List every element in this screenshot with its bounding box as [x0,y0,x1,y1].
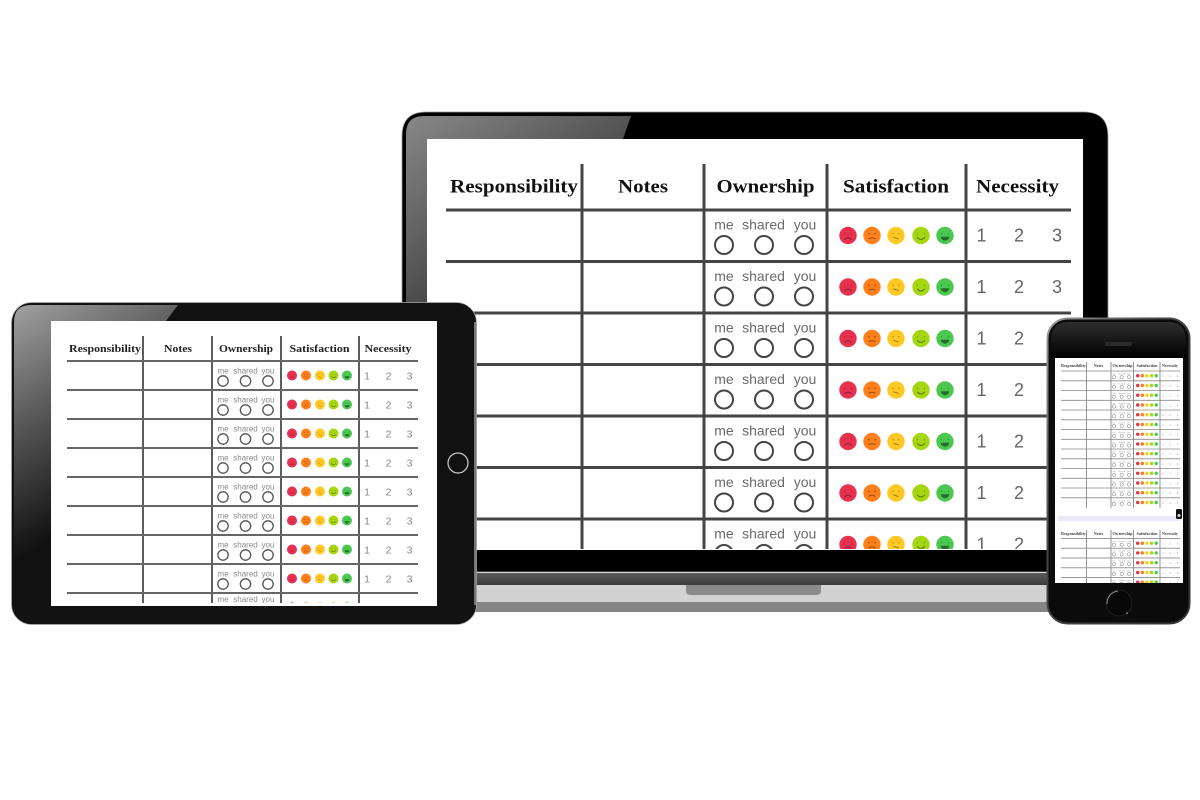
phone page 1 row 10: you [1127,461,1132,463]
tablet row 9 [218,596,349,603]
tablet row 7: 1 [364,544,370,556]
tablet row 2: 2 [386,400,392,412]
tablet row 4: 2 [386,458,392,470]
phone page 1 row 8: shared [1118,441,1126,444]
tablet row 5: shared [233,482,258,492]
phone page 1 row 9: shared [1118,450,1126,454]
phone page 1 row 12: 3 [1177,481,1179,485]
laptop row 2: 2 [1014,277,1024,297]
laptop row 3: 1 [976,329,987,349]
phone page 1 header: Necessity [1162,364,1178,368]
phone page 1 row 13: me [1112,490,1116,492]
laptop table header: Notes [618,176,668,198]
phone page 1 row 14: 1 [1162,501,1164,505]
phone page 1 row 14: shared [1118,499,1126,502]
phone page 1 row 14: you [1127,500,1132,502]
phone worksheet page 1 [1061,362,1180,508]
laptop row 1: you [794,216,816,232]
tablet home button [448,453,468,473]
phone page 1 row 4: 3 [1177,403,1179,407]
phone page 1 header: Notes [1094,364,1104,368]
phone page 1 row 4: you [1127,403,1132,405]
phone page 1 row 11: me [1112,471,1116,473]
phone page 1 row 1: 2 [1169,374,1171,378]
tablet row 5: 1 [364,486,370,498]
laptop table header: Satisfaction [843,176,949,198]
phone page 1 row 4: me [1112,403,1116,405]
phone page 1 row 10: shared [1118,460,1126,463]
tablet row 3: 3 [407,428,413,440]
phone home button [1106,590,1132,616]
tablet row 8: you [262,570,274,578]
phone page 1 row 1: me [1112,374,1116,376]
phone page 1 row 9: me [1112,452,1116,454]
laptop row 7: me [714,526,734,542]
phone page 2 row 2: 3 [1177,551,1179,555]
phone page 1 row 1: 3 [1177,374,1179,378]
phone page 1 row 11: 1 [1162,472,1164,476]
phone page 2 row 2 [1112,550,1179,556]
phone page 1 row 2: 2 [1169,384,1171,388]
laptop row 3: you [794,320,816,336]
laptop screen [427,139,1083,550]
phone page 1 row 4: 2 [1169,403,1171,407]
tablet row 7: 3 [407,544,413,556]
phone page 1 row 11: you [1127,471,1132,473]
phone page 1 row 2: 1 [1162,384,1164,388]
laptop row 6: 3 [1052,483,1062,503]
phone page 2 row 3: 2 [1169,561,1171,565]
phone page 1 row 3: 3 [1177,394,1179,398]
laptop row 5: you [794,422,816,438]
laptop row 7: shared [742,526,785,542]
phone page 1 row 6: shared [1118,421,1126,424]
phone page 2 row 1: 1 [1162,542,1164,546]
laptop table header: Ownership [716,176,814,198]
phone page 2 header [1061,532,1178,536]
phone page 1 row 5: me [1112,412,1116,414]
phone page 1 row 5: shared [1118,412,1126,414]
phone page 2 row 4: 2 [1169,571,1171,575]
phone page 1 row 9: 3 [1177,452,1179,456]
tablet row 1: 1 [364,370,370,382]
tablet row 9: me [217,595,229,604]
phone page 1 header [1061,364,1178,368]
phone page 1 row 14: me [1112,500,1116,502]
phone page 1 row 1 [1112,372,1179,379]
phone page 1 row 5: 1 [1162,413,1164,417]
phone page 1 row 10 [1112,460,1179,467]
tablet row 6: 3 [407,516,413,528]
phone page 1 row 2 [1112,382,1179,389]
laptop row 6 [714,477,1024,512]
phone page 1 row 6: 2 [1169,423,1171,427]
phone page 1 header: Satisfaction [1136,364,1158,368]
tablet table header: Notes [164,343,193,355]
phone page 1 row 11: 2 [1169,472,1171,476]
phone page 1 row 12: me [1112,481,1116,483]
tablet bezel gloss [14,305,178,604]
phone page 2 row 4: 3 [1177,571,1179,575]
laptop row 1: 3 [1052,226,1062,246]
phone page 2 header: Satisfaction [1136,532,1158,536]
phone page 1 row 4: 1 [1162,403,1164,407]
phone page 1 row 3: 2 [1169,394,1171,398]
laptop row 5: 1 [976,432,987,452]
laptop row 7: 2 [1014,535,1024,555]
phone page 1 row 5: 2 [1169,413,1171,417]
tablet row 1: shared [233,366,258,376]
laptop row 1: shared [742,216,785,232]
phone page 1 row 5: you [1127,412,1132,414]
phone page 1 row 8 [1112,441,1179,447]
tablet row 1: 3 [407,370,413,382]
tablet row 6: you [262,512,274,520]
tablet row 2: you [262,396,274,404]
tablet row 2: 1 [364,400,370,412]
phone page 2 header: Responsibility [1061,532,1086,536]
phone page 1 row 3: shared [1118,392,1126,395]
phone page 1 row 4 [1112,402,1179,408]
phone page 1 row 10: 3 [1177,462,1179,466]
laptop row 3: me [714,320,734,336]
phone page 1 row 13: shared [1118,490,1126,492]
phone page 1 row 4: shared [1118,402,1126,405]
tablet row 8: me [217,570,229,578]
phone page 2 row 3: shared [1118,560,1126,562]
laptop row 1: 2 [1014,226,1024,246]
laptop row 5: 3 [1052,432,1062,452]
laptop row 4: shared [742,371,785,387]
phone page 2 header: Notes [1094,532,1104,536]
laptop row 3: 2 [1014,329,1024,349]
laptop row 6: shared [742,474,785,490]
phone page 2 row 2: 1 [1162,551,1164,555]
phone page 1 row 7: shared [1118,431,1126,434]
tablet row 8 [217,570,413,589]
phone page 2 row 5: shared [1118,579,1126,582]
phone page 1 row 3: you [1127,393,1132,395]
tablet row 1: you [262,366,274,376]
laptop row 6: 2 [1014,483,1024,503]
laptop row 4: you [794,371,816,387]
phone page 2 header: Ownership [1112,532,1132,536]
laptop row 5: 2 [1014,432,1024,452]
laptop row 3 [714,322,1024,358]
phone page 1 row 3: 1 [1162,394,1164,398]
phone page 1 row 6: you [1127,422,1132,424]
tablet [12,302,476,624]
tablet row 4: 3 [407,458,413,470]
laptop worksheet table [446,164,1071,563]
tablet row 4: you [262,454,274,462]
tablet row 3: you [262,424,274,434]
phone page 2 row 1 [1112,540,1179,546]
phone page 1 header: Responsibility [1061,364,1086,368]
phone page 1 header: Ownership [1112,364,1132,368]
phone page 1 row 8: 3 [1177,442,1179,446]
phone page 2 row 4 [1112,569,1179,576]
tablet row 7 [217,540,413,560]
tablet row 6: shared [233,512,258,520]
phone page 2 row 3: 1 [1162,561,1164,565]
phone page 2 row 5: 3 [1177,580,1179,584]
tablet row 3: me [217,424,229,434]
tablet row 9: you [262,595,274,604]
laptop row 2: you [794,268,816,284]
phone body [1048,318,1190,624]
phone page 1 row 2: you [1127,383,1132,385]
phone page 1 row 1: you [1127,374,1132,376]
laptop row 4: 2 [1014,380,1024,400]
phone page 2 row 3 [1112,560,1179,566]
laptop row 7: 3 [1052,535,1062,555]
tablet row 3 [217,424,413,444]
tablet row 4 [217,454,413,473]
phone page 1 row 3 [1112,392,1179,398]
laptop row 5: shared [742,422,785,438]
laptop [402,112,1108,612]
phone page 1 row 8: you [1127,442,1132,444]
phone page 1 row 9: you [1127,452,1132,454]
phone page 1 row 12: 1 [1162,481,1164,485]
phone page 2 row 3: you [1127,560,1132,562]
phone page 1 row 12 [1112,480,1179,486]
phone page 2 row 4: me [1112,570,1116,572]
phone page 1 row 5 [1112,412,1179,418]
phone page 1 row 2: 3 [1177,384,1179,388]
tablet row 1: me [217,366,229,376]
tablet row 2: me [217,396,229,404]
phone page 1 row 7: you [1127,432,1132,434]
phone page 1 row 6: me [1112,422,1116,424]
tablet row 5: 2 [386,486,392,498]
phone page 2 row 3: 3 [1177,561,1179,565]
tablet table header [69,344,412,354]
phone page 1 row 12: you [1127,481,1132,483]
phone page 1 row 7: 3 [1177,433,1179,437]
phone page 2 row 4: shared [1118,569,1126,572]
tablet row 5: 3 [407,486,413,498]
laptop row 2: shared [742,268,785,284]
tablet row 6: 1 [364,516,370,528]
tablet row 7: me [217,540,229,550]
tablet body [12,302,476,624]
phone page 2 row 2: you [1127,551,1132,553]
phone page 1 row 5: 3 [1177,413,1179,417]
phone speaker [1105,342,1132,346]
phone page 1 row 8: 2 [1169,442,1171,446]
laptop base [404,573,1104,612]
tablet row 3: 2 [386,428,392,440]
tablet row 8: 1 [364,574,370,586]
tablet row 3: 1 [364,428,370,440]
tablet row 4: 1 [364,458,370,470]
laptop row 6: you [794,474,816,490]
tablet row 2: shared [233,396,258,404]
laptop row 2: 1 [976,277,987,297]
phone page 2 header: Necessity [1162,532,1178,536]
phone page 2 row 2: shared [1118,550,1126,553]
tablet screen [51,321,437,606]
phone page 1 row 14: 3 [1177,501,1179,505]
tablet row 5: you [262,482,274,492]
phone [1048,318,1190,624]
phone page 1 row 13: 2 [1169,491,1171,495]
laptop table header: Responsibility [450,176,579,198]
phone screen [1055,358,1183,583]
laptop row 2 [714,268,1062,306]
tablet row 7: you [262,540,274,550]
phone page 1 row 1: shared [1118,372,1126,376]
tablet row 8: 2 [386,574,392,586]
phone page 1 row 12: shared [1118,480,1126,483]
phone page 2 row 1: me [1112,541,1116,543]
phone page 1 row 11: shared [1118,470,1126,473]
phone page 1 row 9 [1112,450,1179,457]
laptop row 3: 3 [1052,329,1062,349]
laptop row 4: me [714,371,734,387]
tablet row 3: shared [233,424,258,434]
phone page 2 row 5: 1 [1162,580,1164,584]
tablet table header: Ownership [219,343,273,355]
phone page 1 row 9: 1 [1162,452,1164,456]
phone page 1 row 13: 3 [1177,491,1179,495]
phone page 2 row 1: 3 [1177,542,1179,546]
phone page 1 row 6: 3 [1177,423,1179,427]
laptop table header: Necessity [976,176,1060,198]
phone page 1 row 2: shared [1118,382,1126,385]
laptop row 5: me [714,422,734,438]
phone page 1 row 11: 3 [1177,472,1179,476]
tablet right edge highlight [474,322,476,605]
phone page 1 row 7: 2 [1169,433,1171,437]
laptop row 1 [714,216,1062,254]
laptop row 1: 1 [976,226,987,246]
phone page 1 row 10: me [1112,461,1116,463]
laptop row 7: 1 [976,535,987,555]
phone page 1 row 2: me [1112,383,1116,385]
laptop row 6: me [714,474,734,490]
laptop row 7 [715,528,1023,549]
tablet row 4: me [217,454,229,462]
phone page 1 row 9: 2 [1169,452,1171,456]
laptop row 4: 3 [1052,380,1062,400]
laptop row 2: 3 [1052,277,1062,297]
phone page 1 row 6 [1112,421,1179,428]
phone page 1 row 7 [1112,431,1179,438]
phone page 2 row 5: me [1112,580,1116,582]
phone page 2 row 1: you [1127,541,1132,543]
phone page 1 row 11 [1112,470,1179,476]
tablet row 7: 2 [386,544,392,556]
phone page 2 row 2: 2 [1169,551,1171,555]
phone page 1 row 13: you [1127,490,1132,492]
tablet row 9: shared [233,595,258,604]
phone page 2 row 5 [1112,579,1179,585]
phone page 1 row 13: 1 [1162,491,1164,495]
tablet table header: Responsibility [69,343,142,355]
tablet row 6: me [217,512,229,520]
tablet row 1: 2 [386,370,392,382]
phone page 2 row 1: 2 [1169,542,1171,546]
phone worksheet page 2 [1061,530,1180,585]
phone page 1 row 14 [1112,499,1179,506]
scene: three device mockups [11,112,1190,625]
phone top gloss [1051,322,1186,358]
phone page 2 row 4: 1 [1162,571,1164,575]
tablet worksheet table [67,336,418,606]
phone page 2 row 5: 2 [1169,580,1171,584]
phone page 1 row 8: me [1112,442,1116,444]
laptop row 7: you [794,526,816,542]
tablet row 1 [217,366,413,386]
phone page 1 row 12: 2 [1169,481,1171,485]
tablet row 4: shared [233,454,258,462]
tablet row 5 [217,482,413,502]
phone page 1 row 7: 1 [1162,433,1164,437]
phone page 2 row 5: you [1127,580,1132,582]
tablet row 2 [217,396,413,415]
tablet row 7: shared [233,540,258,550]
tablet row 2: 3 [407,400,413,412]
laptop row 1: me [714,216,734,232]
phone page 2 row 1: shared [1118,540,1126,543]
phone page 1 row 8: 1 [1162,442,1164,446]
tablet row 8: 3 [407,574,413,586]
phone page 2 row 3: me [1112,560,1116,562]
phone page 1 row 6: 1 [1162,423,1164,427]
laptop screen bezel [402,112,1108,572]
tablet row 6: 2 [386,516,392,528]
phone page 1 row 10: 2 [1169,462,1171,466]
laptop row 4 [714,374,1024,410]
phone page 1 row 14: 2 [1169,501,1171,505]
laptop row 2: me [714,268,734,284]
phone page divider [1058,516,1180,521]
icon: phone scroll badge [1176,509,1182,519]
phone page 2 row 4: you [1127,570,1132,572]
laptop table header [450,179,1059,196]
laptop bezel gloss [406,116,631,550]
laptop row 4: 1 [976,380,987,400]
phone page 1 row 1: 1 [1162,374,1164,378]
phone page 1 row 10: 1 [1162,462,1164,466]
phone page 1 row 3: me [1112,393,1116,395]
tablet table header: Satisfaction [290,343,350,355]
phone page 2 row 2: me [1112,551,1116,553]
tablet row 8: shared [233,570,258,578]
tablet row 6 [217,512,413,531]
phone page 1 row 13 [1112,490,1179,496]
tablet row 5: me [217,482,229,492]
phone page 1 row 7: me [1112,432,1116,434]
laptop row 3: shared [742,320,785,336]
laptop row 6: 1 [976,483,987,503]
laptop row 5 [714,426,1024,461]
tablet table header: Necessity [364,343,412,355]
